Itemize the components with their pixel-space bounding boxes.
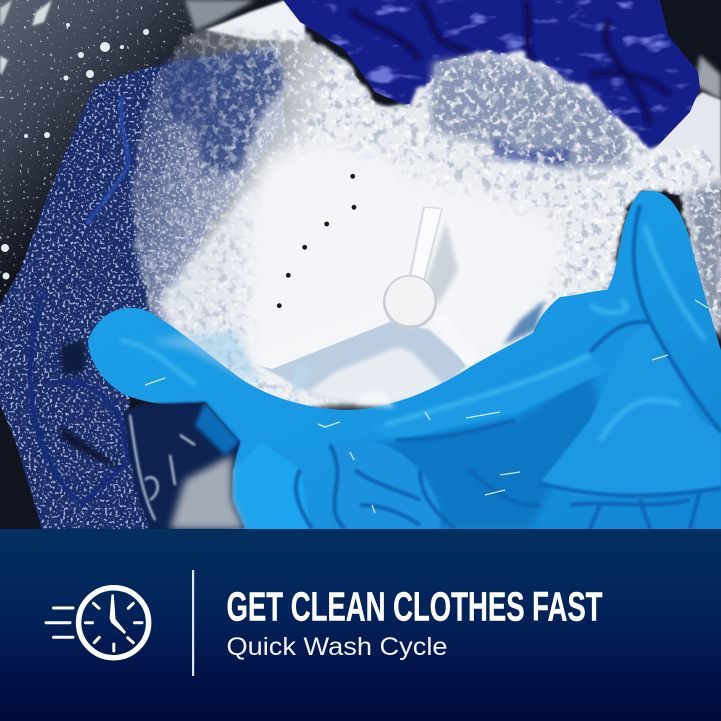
denim blue knit towel, left	[0, 45, 285, 529]
navy gradient banner	[0, 529, 721, 721]
bright blue garment	[88, 191, 721, 540]
fabric folds on the blue garment	[120, 205, 721, 535]
divider	[192, 570, 194, 676]
agitator with three arms	[258, 206, 479, 369]
photo: water agitating laundry inside the washer drum	[0, 0, 721, 540]
stainless steel drum background	[0, 0, 721, 529]
icon: fast clock with speed lines	[46, 588, 149, 658]
water over the blue garment edge	[150, 300, 545, 408]
water droplets on the drum	[1, 23, 149, 280]
dark blue garment, top	[283, 0, 700, 154]
water column, bottom left	[123, 402, 245, 529]
white wash basin	[245, 142, 565, 408]
white tub wall	[205, 0, 721, 180]
subheading: Quick Wash Cycle	[226, 633, 448, 661]
drain holes	[277, 174, 356, 308]
splashing water foam base	[130, 28, 721, 410]
